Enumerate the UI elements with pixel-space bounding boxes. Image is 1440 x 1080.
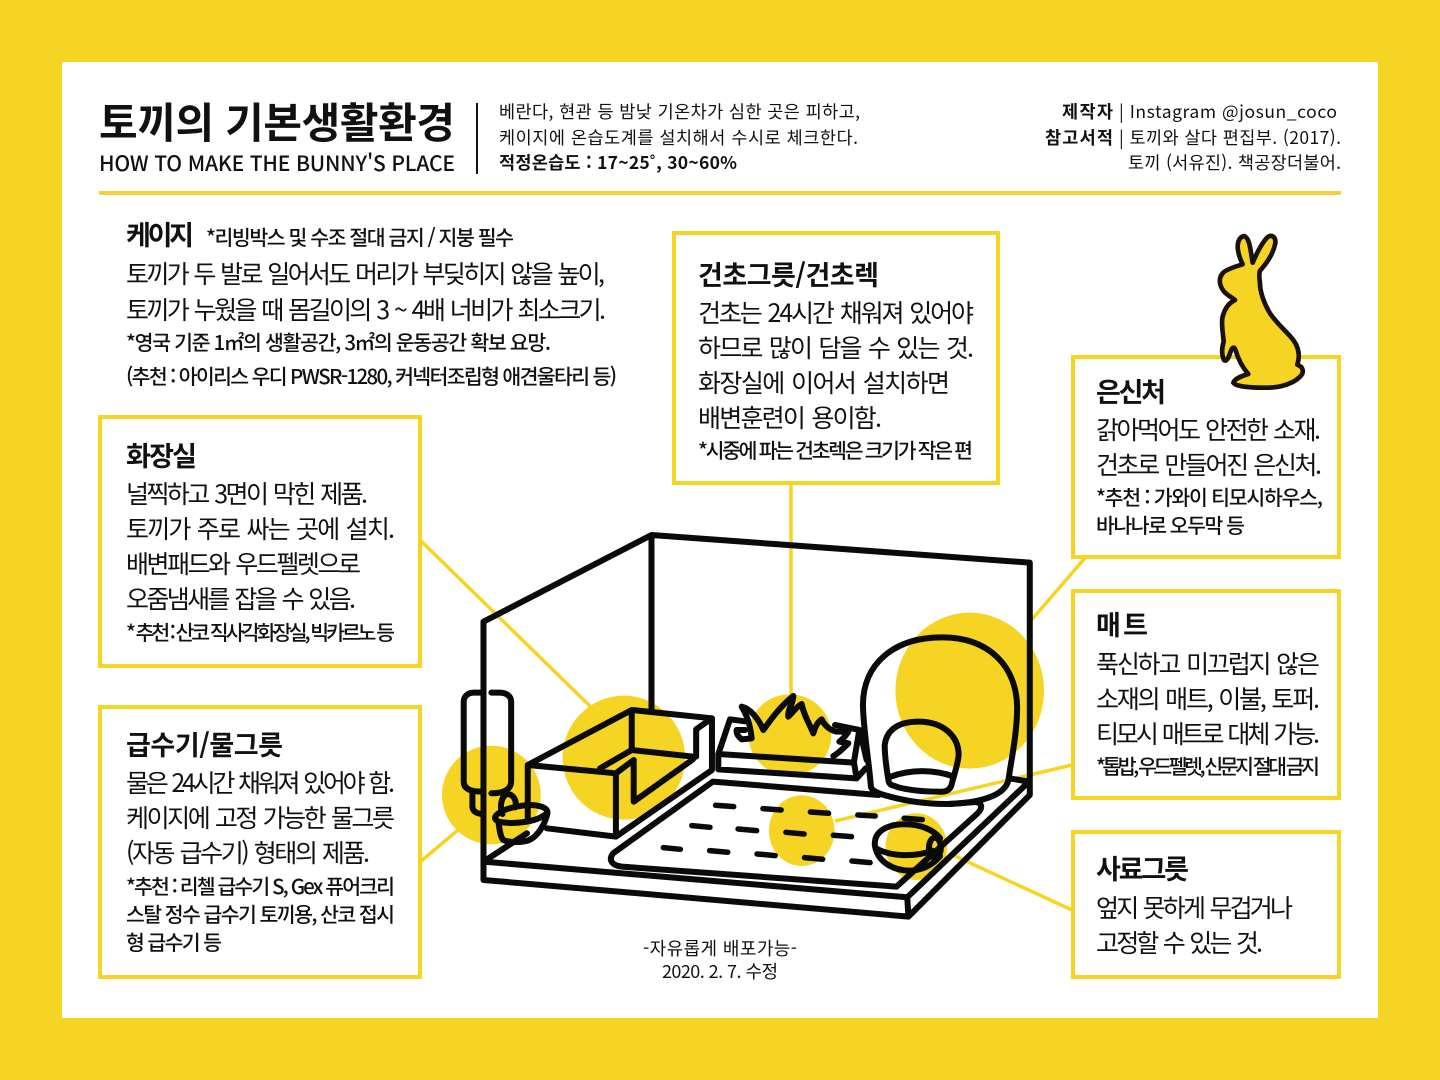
header rule [99, 191, 1341, 195]
title: 토끼의 기본생활환경 [99, 90, 455, 151]
shelter body text: 바나나로 오두막 등 [1096, 509, 1245, 539]
panel: mat [1073, 591, 1339, 798]
climate note [499, 99, 860, 175]
shelter heading: 은신처 [1096, 371, 1166, 410]
cage body text: 토끼가 두 발로 일어서도 머리가 부딪히지 않을 높이, [126, 255, 605, 291]
toilet body text: 널찍하고 3면이 막힌 제품. [126, 475, 368, 511]
cage body text: 토끼가 누웠을 때 몸길이의 3 ~ 4배 너비가 최소크기. [126, 291, 606, 327]
toilet body text: 오줌냄새를 잡을 수 있음. [126, 580, 356, 616]
water body text [126, 764, 395, 956]
toilet body text: 배변패드와 우드펠렛으로 [126, 545, 361, 581]
cage warning: *리빙박스 및 수조 절대 금지 / 지붕 필수 [206, 221, 514, 251]
shelter [863, 637, 1017, 804]
mat [611, 782, 981, 887]
toilet body text: 토끼가 주로 싸는 곳에 설치. [126, 510, 395, 546]
mat dashes [663, 805, 922, 863]
food bowl [875, 824, 940, 871]
mat body text: 티모시 매트로 대체 가능. [1096, 715, 1320, 751]
hay body text: 화장실에 이어서 설치하면 [698, 364, 950, 400]
water body text: (자동 급수기) 형태의 제품. [126, 834, 370, 870]
toilet heading: 화장실 [126, 435, 197, 474]
food bowl body text: 고정할 수 있는 것. [1096, 924, 1263, 960]
mat body text: *톱밥, 우드펠렛, 신문지 절대 금지 [1096, 750, 1320, 780]
cage body text: *영국 기준 1㎡의 생활공간, 3㎡의 운동공간 확보 요망. [126, 326, 551, 356]
header divider [476, 103, 478, 174]
footer note: 2020. 2. 7. 수정 [662, 958, 778, 984]
water body text: 물은 24시간 채워져 있어야 함. [126, 764, 395, 800]
footer note: -자유롭게 배포가능- [643, 935, 797, 961]
water bottle [464, 693, 511, 814]
shelter door [885, 722, 959, 792]
toilet body text [126, 475, 395, 646]
hay body text: 하므로 많이 담을 수 있는 것. [698, 329, 974, 365]
food bowl heading: 사료그릇 [1096, 848, 1189, 887]
litter box [528, 710, 712, 837]
illustration: cage [442, 535, 1044, 917]
panel: food bowl [1073, 832, 1339, 977]
mat body text: 푹신하고 미끄럽지 않은 [1096, 645, 1320, 681]
cage heading: 케이지 [126, 214, 194, 253]
header [99, 90, 1341, 178]
panel: shelter [1073, 357, 1339, 557]
panel: water [100, 707, 420, 977]
shelter body text: 건초로 만들어진 은신처. [1096, 446, 1322, 482]
shelter body text [1096, 411, 1323, 539]
cage body text: (추천 : 아이리스 우디 PWSR-1280, 커넥터조립형 애견울타리 등) [126, 360, 617, 390]
credits: 참고서적 [1045, 125, 1113, 150]
panel: hay rack [674, 233, 998, 483]
water bowl [495, 794, 548, 842]
water body text: 케이지에 고정 가능한 물그릇 [126, 799, 395, 835]
hay body text: 건초는 24시간 채워져 있어야 [698, 294, 974, 330]
highlight bubbles [442, 613, 1044, 880]
food bowl end cap [929, 838, 941, 858]
water body text: *추천 : 리첼 급수기 S, Gex 퓨어크리 [126, 870, 395, 900]
hay body text: *시중에 파는 건초렉은 크기가 작은 편 [698, 434, 973, 464]
shelter body text: 갉아먹어도 안전한 소재. [1096, 411, 1321, 447]
hay body text [698, 294, 974, 464]
food bowl body text [1096, 889, 1293, 960]
hay heading: 건초그릇/건초렉 [698, 254, 879, 293]
water heading: 급수기/물그릇 [126, 724, 283, 763]
footer note [643, 935, 797, 984]
mat heading: 매 트 [1096, 604, 1148, 643]
toilet body text: * 추천 : 산코 직사각화장실, 빅카르노 등 [126, 616, 395, 646]
credits: 제작자 [1062, 99, 1113, 124]
cage frame [483, 535, 1030, 917]
water body text: 형 급수기 등 [126, 926, 222, 956]
subtitle: HOW TO MAKE THE BUNNY'S PLACE [99, 148, 455, 178]
panel: cage [126, 214, 617, 390]
hay body text: 배변훈련이 용이함. [698, 399, 882, 435]
shelter body text: *추천 : 가와이 티모시하우스, [1096, 481, 1323, 511]
food bowl body text: 엎지 못하게 무겁거나 [1096, 889, 1293, 925]
credits [1045, 99, 1341, 175]
credits: | Instagram @josun_coco [1119, 99, 1337, 124]
cage body text [126, 255, 617, 390]
water body text: 스탈 정수 급수기 토끼용, 산코 접시 [126, 898, 395, 928]
icon: rabbit [1220, 236, 1303, 388]
illustration: hay rack and hay [718, 696, 867, 778]
climate note: 베란다, 현관 등 밤낮 기온차가 심한 곳은 피하고, [499, 99, 860, 124]
mat body text [1096, 645, 1320, 780]
credits: | 토끼와 살다 편집부. (2017). [1119, 125, 1341, 150]
connector lines [420, 484, 1085, 910]
panel: toilet [100, 417, 420, 666]
climate note: 적정온습도 : 17~25˚, 30~60% [499, 150, 737, 175]
credits: 토끼 (서유진). 책공장더불어. [1128, 150, 1341, 175]
hay [737, 696, 848, 756]
mat body text: 소재의 매트, 이불, 토퍼. [1096, 680, 1320, 716]
hay rack [718, 719, 867, 778]
climate note: 케이지에 온습도계를 설치해서 수시로 체크한다. [499, 125, 858, 150]
